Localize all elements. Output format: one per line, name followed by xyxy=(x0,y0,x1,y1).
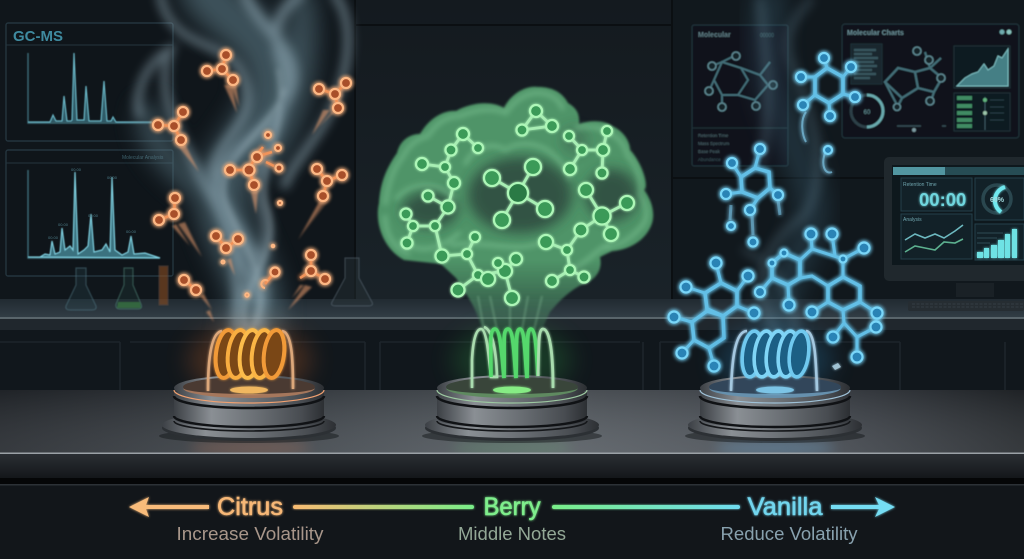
molecule 2 xyxy=(314,78,351,113)
icon: ring gauge: 60 xyxy=(864,110,871,116)
clock readout: 00:00 xyxy=(919,189,966,210)
coil loops xyxy=(731,330,817,391)
panel: lower spectrum chart xyxy=(6,150,173,276)
molecules: berry green xyxy=(400,105,634,305)
panel: lower spectrum chart: Molecular Analysis xyxy=(122,155,164,161)
heater: vanilla coil xyxy=(685,326,865,443)
heading: GC-MS: GC-MS xyxy=(13,28,63,45)
panel: Molecular: Base Peak xyxy=(698,149,721,154)
cloud: berry vapour xyxy=(378,87,653,335)
panel: Molecular xyxy=(692,25,788,166)
molecule 7 xyxy=(211,231,243,253)
arrow: towards citrus xyxy=(129,497,209,517)
panel: Molecular Charts: Molecular Charts xyxy=(847,30,904,37)
monitor: Retention Time xyxy=(903,182,937,188)
molecule 3 xyxy=(153,107,188,145)
panel: lower spectrum chart: 00.00 xyxy=(58,222,69,227)
chart: top chromatogram xyxy=(28,53,152,123)
heater: berry coil xyxy=(422,326,602,443)
chart: area xyxy=(954,46,1010,88)
coil loops xyxy=(208,329,293,391)
panel: lower spectrum chart: 00.00 xyxy=(48,235,59,240)
background wall xyxy=(0,0,1024,320)
molecule 4 xyxy=(225,132,282,190)
smoke: citrus vapour xyxy=(138,0,348,340)
icon: structure diagram xyxy=(885,47,945,110)
label: Middle Notes: Middle Notes xyxy=(458,524,566,544)
monitor: Analysis xyxy=(903,217,922,223)
chart: monitor lines xyxy=(905,225,963,252)
molecule: central xyxy=(484,159,553,228)
panel: Molecular: Retention Time xyxy=(698,133,729,138)
molecule: lower left double ring xyxy=(668,258,760,372)
molecule 6 xyxy=(154,193,180,225)
monitor xyxy=(884,157,1024,311)
icon: donut gauge xyxy=(983,185,1011,213)
icon: structure diagram xyxy=(705,52,777,111)
panel: lower spectrum chart: 00.00 xyxy=(126,229,137,234)
icon: ring gauge xyxy=(851,95,883,127)
molecule 1 xyxy=(202,50,238,85)
line: berry to vanilla xyxy=(552,505,740,509)
sparks xyxy=(222,201,282,297)
panel: Molecular Charts xyxy=(842,24,1019,138)
molecule 5 xyxy=(312,164,347,201)
icons: lab flasks xyxy=(66,258,372,310)
table top xyxy=(0,390,1024,559)
line: citrus to berry xyxy=(293,505,474,509)
wisps to green coil xyxy=(478,296,542,330)
panel: lower spectrum chart: 00.00 xyxy=(88,213,99,218)
panel: Molecular: Abundance xyxy=(698,157,721,162)
molecule: top right xyxy=(516,105,612,178)
label: Reduce Volatility: Reduce Volatility xyxy=(720,524,858,544)
panel: Molecular: Mass Spectrum xyxy=(698,141,730,146)
panel: lower spectrum chart: 00.00 xyxy=(71,167,82,172)
heater: citrus coil xyxy=(159,324,339,443)
panel: Molecular: Molecular xyxy=(698,32,731,39)
panel: Molecular: 00000 xyxy=(760,33,774,39)
chart: monitor bars xyxy=(977,229,1017,258)
coil loops xyxy=(472,327,553,388)
molecule: top hexagon xyxy=(796,53,860,173)
molecule: right xyxy=(539,183,634,287)
molecule: middle hexagon xyxy=(721,144,783,246)
smoke: vanilla vapour xyxy=(745,0,818,340)
shelf and cabinets xyxy=(0,299,1024,390)
molecule 10 xyxy=(261,268,280,288)
icon: donut gauge: 60% xyxy=(990,197,1005,204)
label: Increase Volatility: Increase Volatility xyxy=(176,524,324,544)
chart: mass spectrum xyxy=(28,170,160,258)
panel: GC-MS top chart xyxy=(6,23,173,141)
volatility scale xyxy=(129,493,895,544)
chart: status rows xyxy=(954,93,1010,131)
molecule 9 xyxy=(179,275,201,295)
molecule: left chain xyxy=(400,128,522,305)
panel: lower spectrum chart: 00.00 xyxy=(107,175,118,180)
molecule: lower right ring system xyxy=(755,228,882,362)
arrow: towards vanilla xyxy=(831,497,895,517)
molecules: vanilla blue xyxy=(668,53,882,372)
molecules: citrus orange xyxy=(153,50,351,322)
label: Berry: Berry xyxy=(484,493,541,521)
speed trails xyxy=(172,82,336,322)
label: Vanilla: Vanilla xyxy=(748,493,823,521)
label: Citrus: Citrus xyxy=(217,493,283,521)
molecule 8 xyxy=(300,250,330,284)
